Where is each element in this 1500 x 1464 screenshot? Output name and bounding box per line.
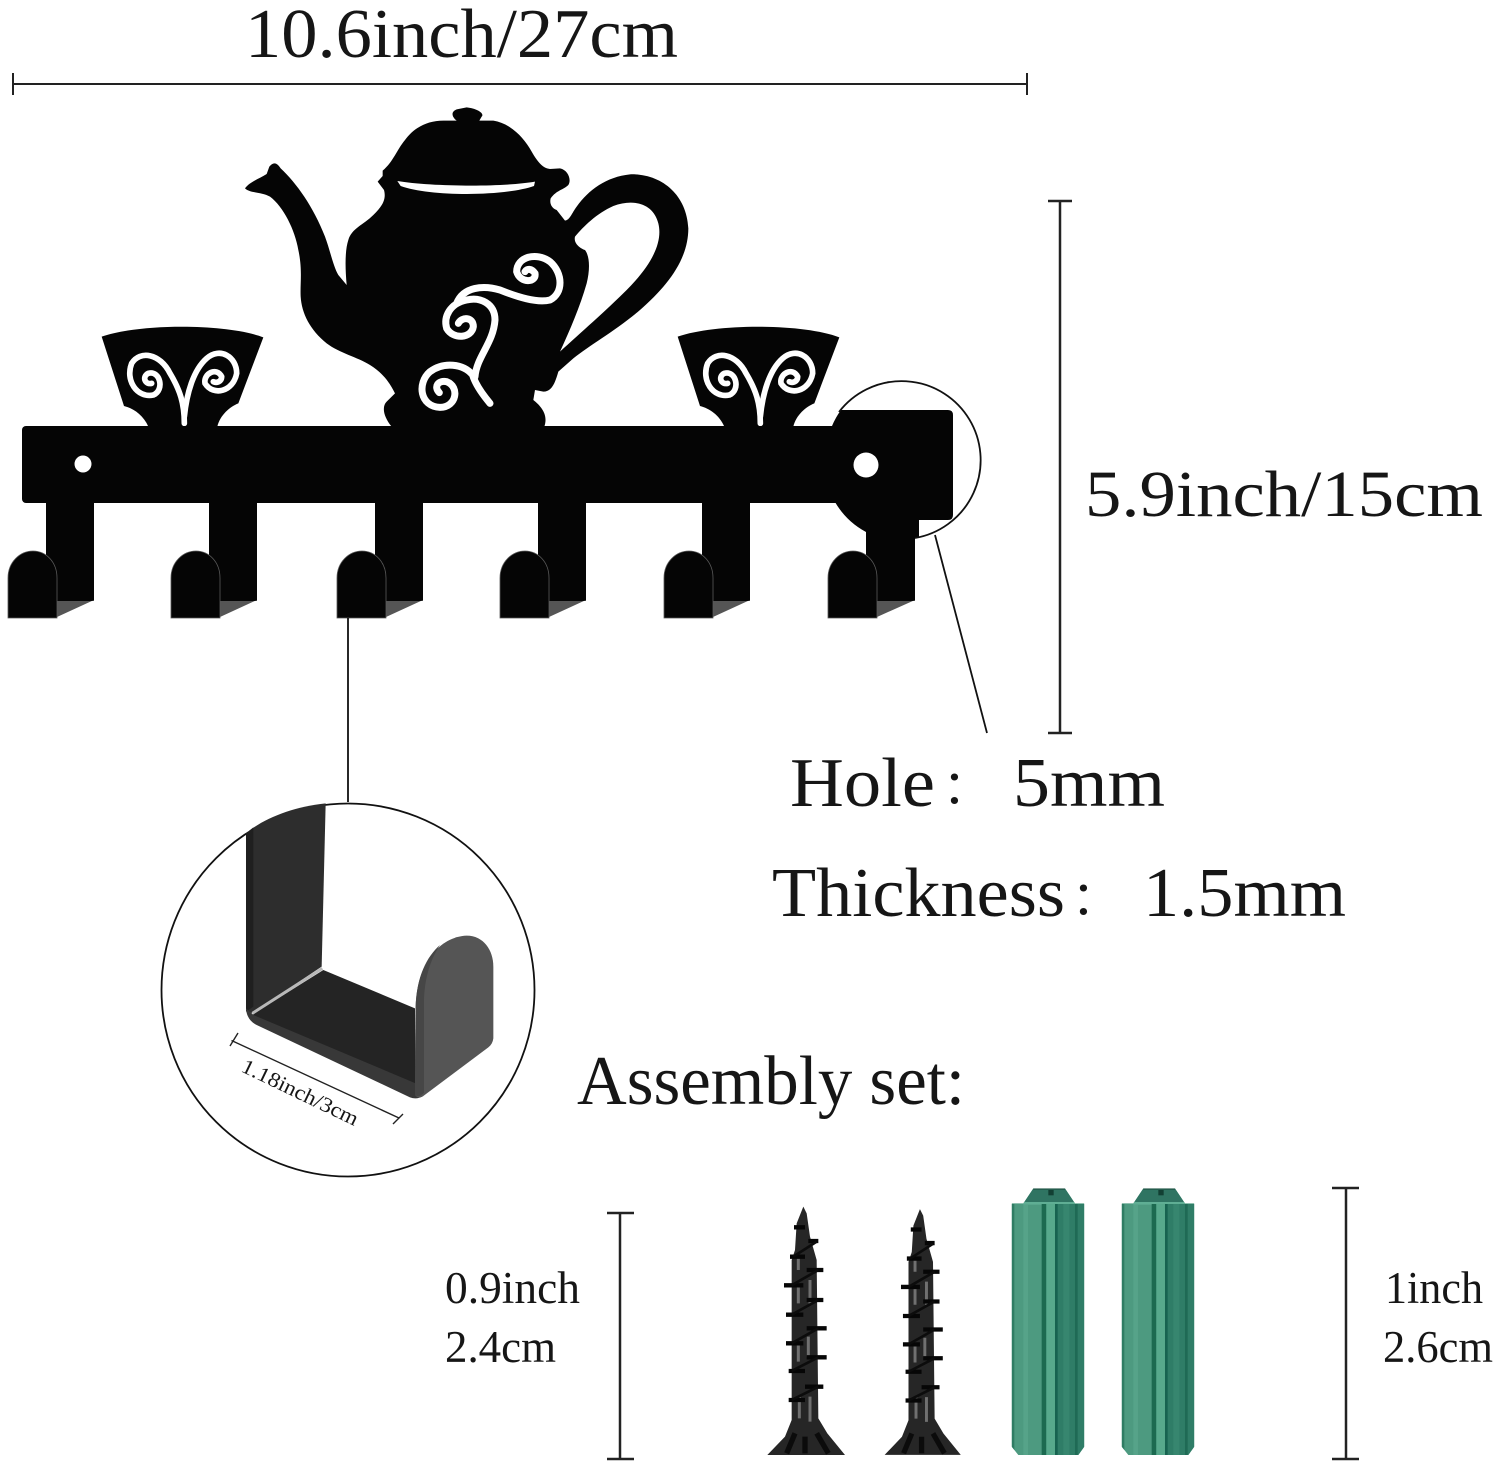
height dimension: 5.9inch/15cm: 5.9inch/15cm: [1085, 458, 1483, 531]
screw length label: 0.9inch: [445, 1263, 580, 1313]
height dimension: 5.9inch/15cm: [1048, 201, 1483, 733]
small mounting hole: [74, 456, 92, 472]
hook rack silhouette: [8, 107, 953, 618]
hole size label: Hole: [790, 745, 935, 822]
hook 5: [664, 502, 750, 618]
teapot: [245, 107, 688, 427]
hook width dimension: [230, 1033, 403, 1131]
plug dimension bracket: [1332, 1188, 1359, 1459]
plug length label: 1inch: [1385, 1263, 1483, 1313]
magnifier callout on hole: [839, 381, 987, 733]
hook 2: [171, 502, 257, 618]
hook 4: [500, 502, 586, 618]
hook 6: [828, 520, 915, 618]
screws and wall plugs: [767, 1187, 1194, 1457]
screw length label: 2.4cm: [445, 1322, 556, 1372]
screw length label: [445, 1263, 580, 1372]
hole size label: [790, 745, 1165, 822]
left cup: [102, 327, 263, 427]
hole size label: 5mm: [1013, 745, 1165, 822]
wall plug 1: [1012, 1187, 1084, 1457]
plug length label: 2.6cm: [1383, 1322, 1493, 1372]
thickness label: 1.5mm: [1143, 855, 1346, 932]
hole size label: ：: [941, 754, 999, 819]
enlarged hook illustration: [246, 803, 493, 1098]
width dimension: 10.6inch/27cm: [13, 0, 1027, 95]
mounting bar: [22, 426, 852, 503]
right cup: [678, 327, 839, 427]
hook width dimension: 1.18inch/3cm: [238, 1054, 363, 1131]
hook 3: [337, 502, 423, 618]
large mounting hole: [854, 452, 878, 478]
assembly set heading: Assembly set:: [577, 1043, 965, 1120]
thickness label: ：: [1070, 865, 1128, 930]
hook 1: [8, 502, 94, 618]
screw 1: [767, 1207, 845, 1455]
wall plug 2: [1122, 1187, 1194, 1457]
plug length label: [1383, 1263, 1493, 1372]
screw 2: [885, 1209, 961, 1455]
enlarged bar end with hole: [820, 410, 953, 601]
hook detail circle: [162, 803, 534, 1176]
thickness label: Thickness: [772, 855, 1065, 932]
leader line to hook detail: [347, 618, 349, 802]
thickness label: [772, 855, 1346, 932]
screw dimension bracket: [607, 1213, 634, 1459]
